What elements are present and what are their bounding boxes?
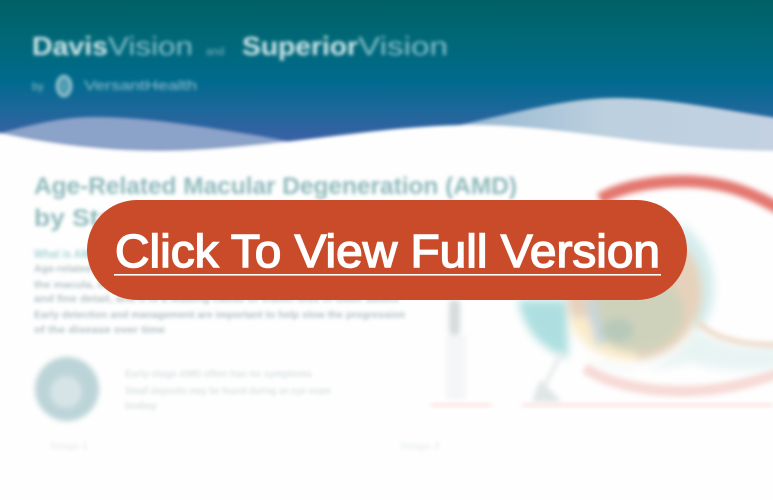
lens and cornea teal shapes [518, 222, 773, 371]
white page edge wave [0, 125, 773, 185]
stage description text: Early-stage AMD often has no symptoms [125, 369, 312, 380]
stage description text [125, 369, 331, 412]
header logos: VersantHealth [84, 77, 197, 93]
pale right wave [380, 98, 773, 175]
header logos [32, 31, 448, 96]
purple left wave [0, 117, 340, 170]
header logos: Vision [358, 31, 448, 61]
intro text block: Age-related macular degeneration is a common eye disease that damages [34, 263, 404, 275]
illustration: standing figure and stand [446, 300, 562, 402]
header banner with waves [0, 0, 773, 185]
ground line [431, 403, 773, 407]
button label: Click To View Full Version [115, 225, 660, 277]
header logos: Vision [108, 31, 193, 61]
stage description text: Small deposits may be found during an eye exam [125, 386, 331, 397]
intro text block: Early detection and management are important to help slow the progression [34, 309, 405, 321]
bottom column labels [50, 441, 440, 451]
retina circle [566, 224, 702, 360]
logo: DavisVision and SuperiorVision: Davis [32, 31, 108, 61]
intro text block: and fine detail, and it is a leading cause of vision loss in older adults [34, 293, 399, 305]
title [34, 173, 517, 232]
bottom column labels: Stage 1 [50, 441, 88, 451]
icon: stage badge [35, 357, 99, 421]
intro text block: the macula, the central part of the retina responsible for sharp vision [34, 279, 394, 291]
stage description text: today [125, 401, 158, 412]
header logos: by [32, 81, 44, 93]
header logos: Superior [242, 31, 358, 61]
optic nerve band [698, 322, 773, 345]
intro text block: of the disease over time [34, 324, 165, 336]
bottom column labels: Stage 2 [400, 441, 440, 451]
eye outer red arcs [585, 181, 773, 391]
intro text block: What is AMD? [34, 247, 104, 261]
intro text block [34, 247, 405, 336]
title: Age-Related Macular Degeneration (AMD) [34, 173, 517, 200]
illustration: eye cross-section [518, 181, 773, 391]
call-to-action button [87, 200, 687, 300]
title: by Stage [34, 205, 144, 232]
header logos: and [206, 46, 224, 58]
